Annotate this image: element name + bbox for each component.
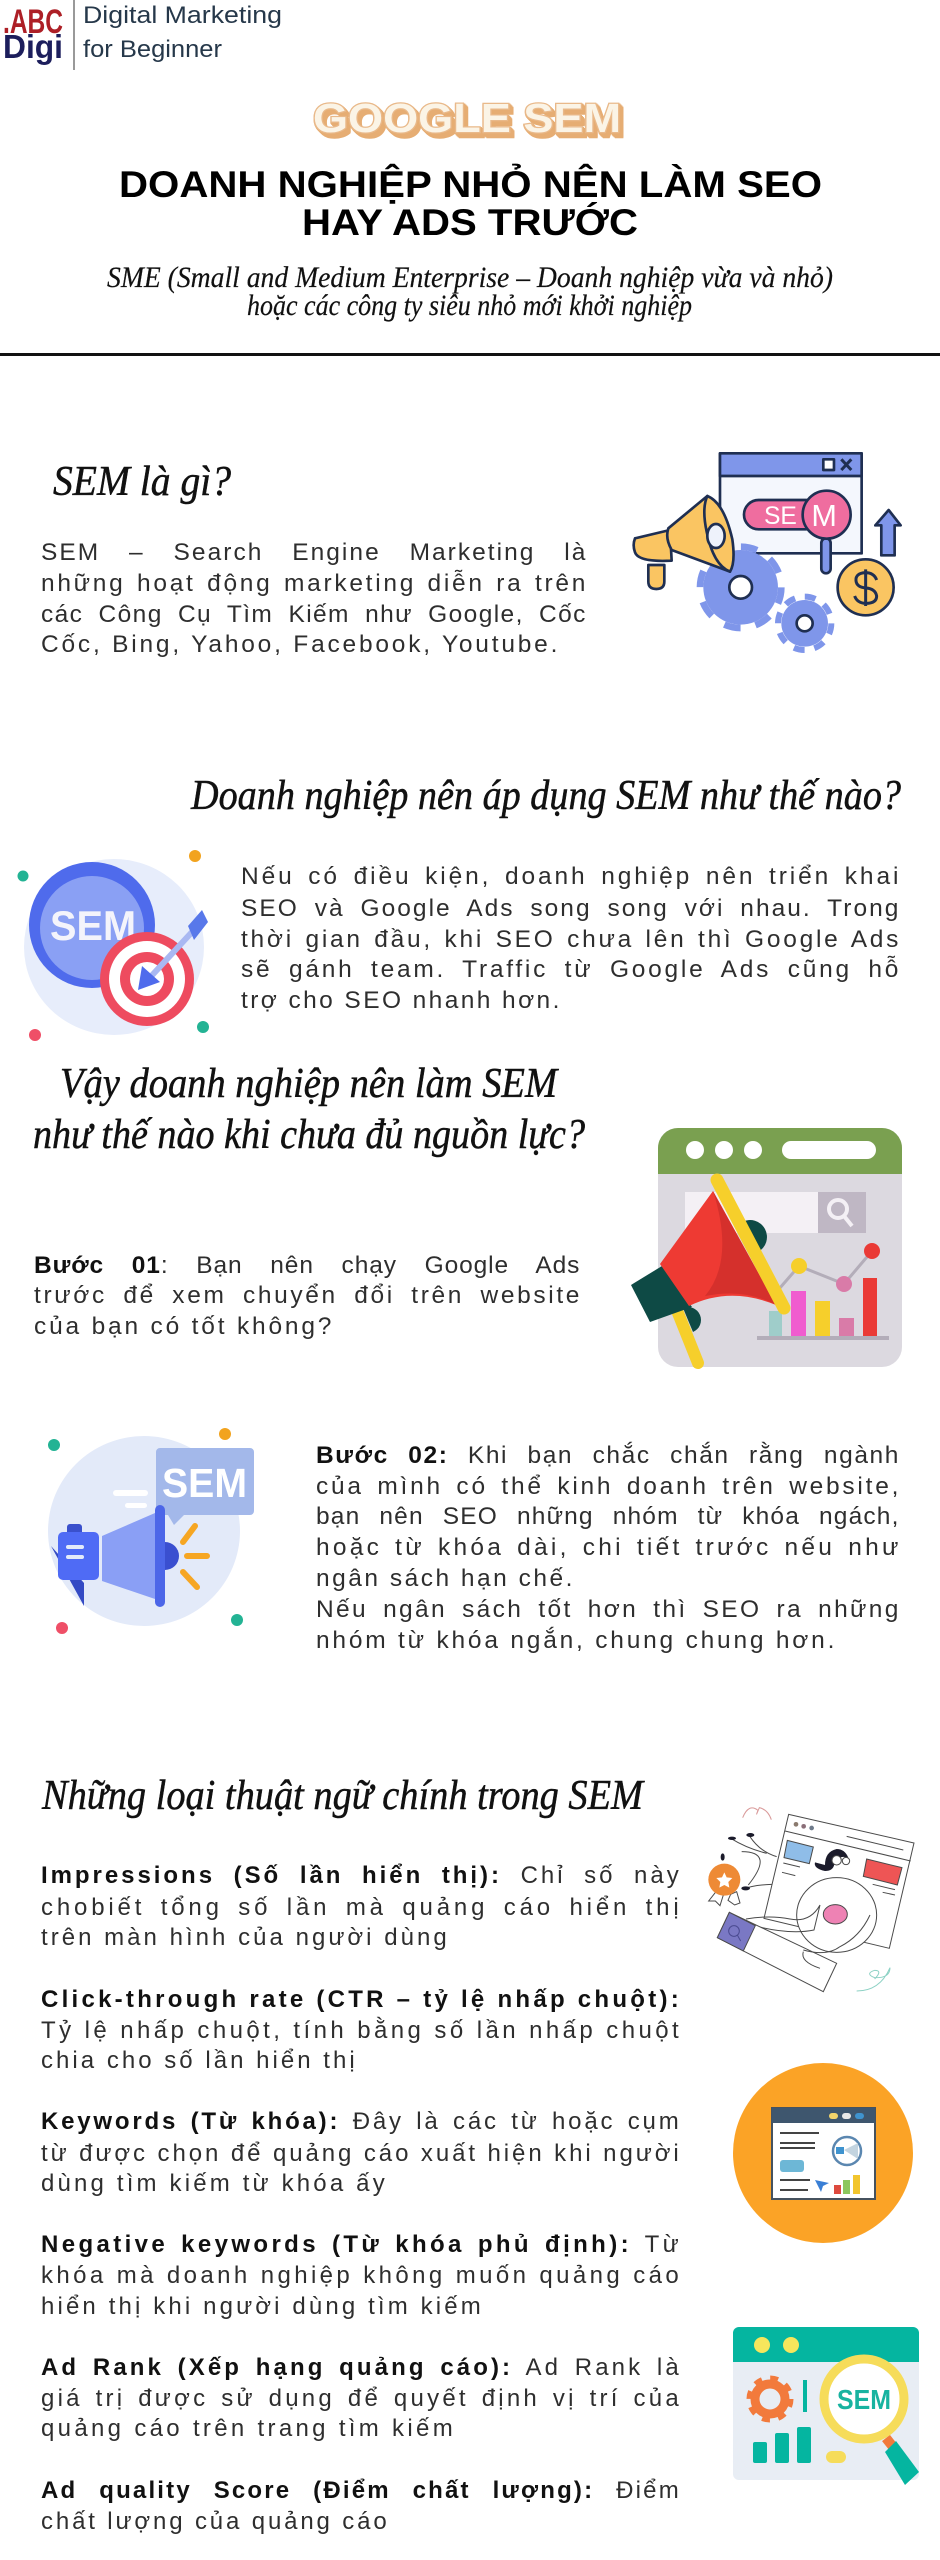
- logo tagline: for Beginner: [83, 36, 222, 63]
- icon: SEM magnifier on browser: SEM: [837, 2384, 891, 2415]
- megaphone: [634, 496, 734, 589]
- text: Bước 02: [316, 1442, 900, 1654]
- section: SEM là gì: [41, 453, 901, 658]
- text: SEM definition: Cốc, Bing, Yahoo, Facebook, Youtube.: [41, 631, 559, 658]
- browser window: M: [811, 499, 837, 533]
- section: Bước 02: [48, 1428, 900, 1654]
- text: Bước 02: ngân sách hạn chế.: [316, 1565, 574, 1592]
- text: Bước 01: [34, 1252, 581, 1340]
- term: Impressions: trên màn hình của người dùng: [41, 1924, 449, 1951]
- icon: megaphone, browser, gears, coin: [634, 453, 901, 650]
- text: Bước 01: Bước 01: Bạn nên chạy Google Ads: [34, 1252, 581, 1279]
- main title: HAY ADS TRƯỚC: [302, 201, 638, 243]
- text: SEO and Ads together: sẽ gánh team. Traffic từ Google Ads cũng hỗ: [241, 956, 900, 983]
- term: Ad Rank: [41, 2354, 681, 2442]
- icon: orange circle with browser: [733, 2063, 913, 2243]
- term: Ad quality Score: chất lượng của quảng cáo: [41, 2508, 389, 2535]
- term: Keywords: [41, 2108, 681, 2197]
- icon: browser with red megaphone and charts: [631, 1128, 902, 1367]
- text: SEM definition: các Công Cụ Tìm Kiếm như Google, Cốc: [41, 601, 587, 628]
- text: Bước 02: của mình có thể kinh doanh trên website,: [316, 1473, 900, 1500]
- term: Click-through rate: chia cho số lần hiển thị: [41, 2047, 357, 2074]
- term: Keywords: dùng tìm kiếm từ khóa ấy: [41, 2170, 387, 2197]
- text: SEO and Ads together: trợ cho SEO nhanh hơn.: [241, 987, 561, 1014]
- logo wordmark: ABC Digi: .ABC: [3, 3, 63, 41]
- text: Bước 02: hoặc từ khóa dài, chi tiết trước nếu như: [316, 1534, 900, 1561]
- medal: [708, 1864, 740, 1906]
- text: SEO and Ads together: Nếu có điều kiện, doanh nghiệp nên triển khai: [241, 863, 900, 890]
- section: Bước 01: [33, 1061, 902, 1367]
- megaphone: [631, 1180, 784, 1363]
- icon: SEM target: [18, 850, 209, 1041]
- gears: [700, 547, 831, 650]
- badge title: GOOGLE SEM: GOOGLE SEM: [313, 95, 621, 141]
- text: SEO and Ads together: thời gian đầu, khi SEO chưa lên thì Google Ads: [241, 926, 900, 953]
- text: Bước 01: của bạn có tốt không?: [34, 1313, 333, 1340]
- term: Ad Rank: Ad Rank (Xếp hạng quảng cáo): Ad Rank là: [41, 2354, 681, 2381]
- text: SEM definition: những hoạt động marketing diễn ra trên: [41, 570, 587, 597]
- icon: blue megaphone with SEM bubble: [48, 1428, 254, 1634]
- term: Negative keywords: [41, 2231, 681, 2320]
- section: thuật ngữ chính: [41, 1773, 919, 2535]
- logo tagline: [83, 2, 282, 63]
- logo tagline: Digital Marketing: [83, 2, 282, 29]
- logo wordmark: ABC Digi: [3, 3, 63, 65]
- text: Bước 02: nhóm từ khóa ngắn, chung chung hơn.: [316, 1627, 836, 1654]
- main title: DOANH NGHIỆP NHỎ NÊN LÀM SEO: [119, 163, 822, 205]
- logo: [3, 0, 282, 70]
- section: Doanh nghiệp nên áp dụng SEM: [18, 773, 901, 1041]
- term: Negative keywords: Negative keywords (Từ khóa phủ định): Từ: [41, 2231, 681, 2258]
- term: Ad Rank: giá trị được sử dụng để quyết định vị trí của: [41, 2385, 681, 2412]
- browser window: SE: [764, 503, 797, 530]
- coin: [838, 559, 894, 615]
- heading: như thế nào khi chưa đủ nguồn lực?: [33, 1112, 585, 1158]
- text: SEM definition: [41, 539, 587, 658]
- term: Negative keywords: hiển thị khi người dùng tìm kiếm: [41, 2293, 483, 2320]
- text: SEO and Ads together: [241, 863, 900, 1014]
- arrow up: [875, 510, 901, 555]
- term: Ad Rank: quảng cáo trên trang tìm kiếm: [41, 2415, 455, 2442]
- text: SEO and Ads together: SEO và Google Ads song song với nhau. Trong: [241, 895, 900, 922]
- term: Ad quality Score: [41, 2477, 681, 2535]
- browser window: [720, 453, 862, 573]
- subtitle: hoặc các công ty siêu nhỏ mới khởi nghiệp: [247, 289, 692, 322]
- text: Bước 02: Nếu ngân sách tốt hơn thì SEO ra những: [316, 1596, 900, 1623]
- bars and line chart: [757, 1243, 889, 1340]
- heading: SEM là gì?: SEM là gì?: [53, 459, 231, 505]
- icon: SEM magnifier on browser: [733, 2327, 919, 2485]
- term: Keywords: từ được chọn để quảng cáo xuất hiện khi người: [41, 2140, 681, 2167]
- main title: [119, 163, 822, 243]
- heading: Những loại thuật ngữ chính trong SEM: [41, 1773, 645, 1819]
- term: Impressions: chobiết tổng số lần mà quảng cáo hiển thị: [41, 1894, 681, 1921]
- text: Bước 02: bạn nên SEO những nhóm từ khóa ngách,: [316, 1503, 900, 1530]
- icon: blue megaphone with SEM bubble: SEM: [162, 1460, 247, 1506]
- term: Impressions: Impressions (Số lần hiển thị): Chỉ số này: [41, 1862, 681, 1889]
- text: SEM definition: SEM – Search Engine Marketing là: [41, 539, 587, 566]
- icon: woman at web page with medal: [708, 1808, 914, 1992]
- term: Negative keywords: khóa mà doanh nghiệp không muốn quảng cáo: [41, 2262, 681, 2289]
- subtitle: [107, 261, 833, 322]
- icon: SEM target: SEM: [50, 902, 136, 949]
- term: Click-through rate: Tỷ lệ nhấp chuột, tính bằng số lần nhấp chuột: [41, 2017, 681, 2044]
- term: Click-through rate: [41, 1986, 681, 2074]
- term: Click-through rate: Click-through rate (CTR – tỷ lệ nhấp chuột):: [41, 1986, 681, 2013]
- heading: [33, 1061, 585, 1158]
- term: Impressions: [41, 1862, 681, 1951]
- logo wordmark: ABC Digi: Digi: [3, 28, 63, 65]
- subtitle: SME (Small and Medium Enterprise – Doanh nghiệp vừa và nhỏ): [107, 261, 833, 294]
- term: Ad quality Score: Ad quality Score (Điểm chất lượng): Điểm: [41, 2477, 681, 2504]
- heading: Vậy doanh nghiệp nên làm SEM: [60, 1061, 559, 1107]
- text: Bước 01: trước để xem chuyển đổi trên website: [34, 1282, 581, 1309]
- text: Bước 02: Bước 02: Khi bạn chắc chắn rằng ngành: [316, 1442, 900, 1469]
- term: Keywords: Keywords (Từ khóa): Đây là các từ hoặc cụm: [41, 2108, 681, 2135]
